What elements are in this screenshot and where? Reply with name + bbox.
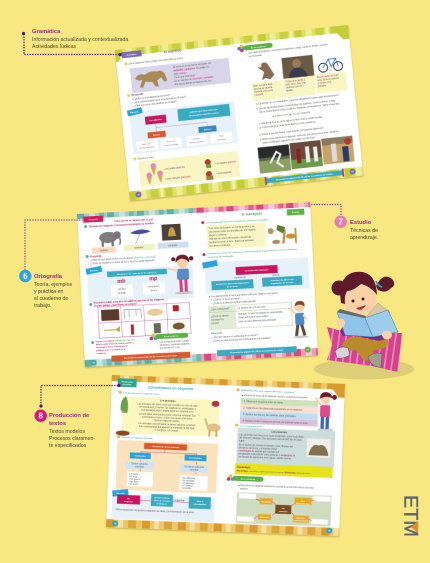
heading: El adjetivo: El adjetivo [163, 48, 182, 54]
sweater [340, 323, 390, 341]
illustration: girl pointing [167, 254, 195, 295]
pill: En tu cuaderno: En tu cuaderno [251, 45, 266, 49]
label: Ortografía: el cuaderno de [34, 296, 68, 302]
panel: Aprendo esquema: ideas y [196, 501, 204, 503]
page number 55: 55 [328, 531, 331, 533]
text cards: Es pequeña, de color [317, 74, 339, 79]
panel: classification chart: vertebral [190, 469, 199, 472]
panel: Aprendo m antes de b y p: Escribimos "m" antes de la "b" y de la "p". [117, 271, 158, 276]
panel: La técnica del subrayado [202, 255, 310, 294]
left page content: Lee el siguiente texto. Luego, [160, 340, 190, 344]
right page content: Lee atentamente el texto y subraya las palabras subrayadas. [206, 218, 270, 224]
text cards: y ruedas muy [318, 81, 332, 85]
right page content: ■ Reproduce el siguiente esquema y completa con la información del texto [238, 484, 315, 490]
right page content: • ¿Por qué usamos el subrayado en un texto? [211, 334, 258, 339]
panel: monkey text: Por eso lo llaman el travieso del zoo. [175, 79, 213, 86]
panel: La técnica del subrayado: consiste en [234, 276, 247, 280]
panel: scheme: cavernas [279, 510, 288, 513]
panel: classification chart: • las aves [129, 481, 139, 484]
option stripes: 3. Escribe los títulos y las palabras clave principales. [243, 413, 297, 418]
panel: Los animales: el cangrejo y el caracol. [155, 429, 179, 433]
right page content: ■ Lee atentamente el texto que debes subrayar. Fíjate en las partes. [209, 292, 278, 298]
option stripes [240, 398, 318, 427]
text cards: azul, tiene un asiento [317, 77, 340, 82]
pill: En tu cuaderno [227, 474, 264, 482]
left page content: ¿Cómo se escribe la m antes de la b y la p? en estas palabras? [91, 259, 156, 265]
table: Usar un color diferente para destacar. [238, 319, 277, 324]
panel: classification chart: No tienen columna [185, 465, 204, 469]
picture: umbrella [130, 229, 151, 244]
right page content: ■ Lee las siguientes frases y relaciónalas los adjetivos. Vuelve a leerlo. Luego [257, 99, 336, 111]
left page content: ¿Antes de qué letras va la m en la palabra sombrilla y campana? [90, 256, 157, 262]
label: Gramática: Información actualizada y contextualizada [32, 37, 128, 43]
head [332, 272, 394, 315]
spread: Producción de textos pages [106, 375, 345, 536]
picture: llama [204, 418, 221, 437]
panel: classification chart: Vertebrados [134, 454, 147, 458]
right page content: Lee el siguiente texto. [240, 424, 263, 428]
panel: Aprendo concept map: Plural [219, 134, 224, 138]
panel: scheme: Animales [296, 516, 306, 520]
panel: classification chart: • el caracol [181, 484, 193, 488]
panel: Aprendo m antes de b y p [85, 261, 194, 303]
right page content: cuatro cualidades (adjetivos) de cuáles son las fotos. [262, 136, 316, 145]
shadow [314, 358, 414, 380]
left page content: palabras con m y repasa en tu [96, 348, 127, 352]
panel: Aprendo esquema: subordinadas [193, 503, 207, 506]
label: Producción de textos: te especificados [49, 443, 87, 449]
right page content [237, 34, 355, 175]
label: Producción de textos: 8 [38, 412, 43, 421]
photo: cave [306, 438, 331, 458]
page number 53: 53 [307, 349, 310, 352]
panel: ice cream activity: • un helado gracioso [164, 166, 186, 171]
pill: En tu cuaderno: En tu cuaderno [164, 335, 179, 338]
right page content: la técnica del subrayado. [208, 255, 234, 259]
page number 53 [305, 346, 311, 353]
panel: Las cavernas: del Silencio y Bosque. Son los pasos más de 240 km de largo, [239, 437, 303, 442]
label: Gramática: Actividades lúdicas [32, 44, 77, 50]
pill: En tu cuaderno [149, 332, 188, 340]
panel: scheme: características [296, 502, 311, 506]
photo: volleyball [321, 136, 355, 165]
page number 50 [135, 191, 142, 198]
panel: Vocabulario: Murciélago: mamífero volador que vive en cuevas. Estalactita: forma de agua. [237, 469, 311, 475]
right page content: Reflexiona. ¿Por qué usamos diferentes esquemas? [241, 389, 296, 394]
panel: monkey text [130, 58, 231, 93]
panel: Aprendo concept map: El mono travieso [190, 140, 204, 145]
panel: Aprendo esquema: Utilizo esquemas me ayuda a organizar las ideas y la información de un texto. [116, 508, 195, 514]
option stripes: 4. Revisa si todo el esquema permite comprender mejor el texto. [243, 419, 309, 425]
panel: classification chart: vertebral [135, 465, 144, 469]
panel: Las cavernas: Las cavernas son huecos en rocas profundas, como la de Belén [239, 434, 305, 439]
text cards: y grande. [254, 93, 264, 97]
panel: Aprendo esquema: esquema [124, 501, 134, 503]
right page content: ■ el perro alegre ■ unos niños ágiles ■ unos cuadernos [260, 120, 317, 129]
panel: classification chart: • los peces [129, 479, 141, 481]
panel: Aprendo concept map: Los monos [217, 139, 226, 142]
right page content [225, 388, 338, 534]
label: Producción de textos: Textos modelos [49, 429, 85, 435]
pill: En tu cuaderno [243, 43, 273, 51]
panel: Las cavernas: tiempo le da forma, y el monitor llama [239, 447, 278, 451]
panel: monkey text: El mono es el rey de los animales. Es [173, 62, 212, 69]
label: Estudio: Técnicas de [350, 228, 378, 234]
text cards: cariñoso con mi [286, 85, 303, 90]
section tag: Estudio [286, 208, 305, 216]
panel: monkey text: Tiene una cola larga. [174, 74, 196, 79]
panel: Los animales: Los animales vertebrados tienen columna vertebral. Son [139, 412, 197, 418]
text cards: grandes. [318, 84, 327, 88]
picture: animals [267, 224, 297, 245]
text cards: Tiene la cola corta [254, 89, 274, 94]
bottom bar [217, 346, 297, 356]
spread: Ortografía and Estudio pages [77, 202, 318, 367]
panel: Aprendo concept map: palabras que dicen cómo son [190, 108, 218, 114]
left page content: identifica y copia las palabras [160, 343, 190, 347]
left page content: • ¿Qué características tiene el personaje en el texto? [132, 96, 187, 105]
panel: Aprendo m antes de b y p: mb [117, 279, 126, 285]
panel: Los animales: Los animales invertebrados no tienen columna vertebral. [138, 422, 196, 427]
left page content: Observo y creo [138, 156, 154, 161]
panel: Aprendo m antes de b y p: ombligo [118, 293, 127, 295]
word labels: campana [168, 245, 178, 247]
panel: classification chart: • la hormiga [182, 479, 195, 483]
right page content: ■ Conversa con un compañero: ¿qué has descubierto sobre estas descripciones? [256, 94, 340, 106]
left page content: descarga la tarea. Selecciona las [96, 345, 129, 349]
panel: Aprendo m antes de b y p: tiempo [150, 289, 158, 292]
panel: Aprendo concept map: las personas, animales y cosas [189, 111, 220, 118]
panel: Aprendo esquema [111, 488, 215, 522]
bottom bar: Desarrolla las páginas 85 y 86 de tu cuaderno de trabajo. [124, 354, 178, 360]
panel: text about animals: Además de mono del corazón, donde hay [209, 236, 252, 241]
heading: Uso de la m: Uso de la m antes de b y p [114, 217, 153, 223]
panel: Aprendo esquema: en bloques [157, 503, 168, 506]
panel: text about animals: alegre y contenta. [209, 233, 227, 237]
label: Producción de textos: Producción de [49, 413, 90, 419]
left page content: Observa las imágenes y pronuncia lentamente su nombre. [89, 222, 155, 228]
picture: eagle [257, 62, 275, 81]
panel: Los animales: También algunos reptiles. [154, 419, 180, 423]
page number 52 [91, 359, 97, 366]
picture: parrot [212, 401, 220, 407]
panel: text about animals: Si el mono de bosque, es rey de la selva y se [209, 225, 255, 230]
section tag: Gramática [121, 50, 142, 58]
label: Producción de textos: textos [49, 421, 66, 427]
left page content: Lee el siguiente texto y fíjate cómo describen al mono. [128, 57, 184, 66]
panel: Aprendo esquema: ideas de un texto [154, 499, 171, 503]
left page content: Observa el esquema del texto. [121, 436, 153, 440]
panel: Las cavernas: lugar. [239, 440, 245, 443]
bottom bar [265, 169, 344, 185]
legs [342, 337, 388, 361]
panel: Aprendo esquema: Aprendo [116, 492, 125, 495]
panel: classification chart: • el perro [129, 473, 139, 476]
illustration: girl [314, 392, 337, 432]
panel: classification chart: • el cangrejo [182, 482, 195, 485]
photo: football [258, 144, 291, 173]
panel: Los animales: invertebrados según tengan columna vertebral o no. [141, 408, 194, 413]
panel: Los animales [122, 396, 220, 437]
panel: Aprendo concept map: Número [204, 128, 212, 132]
left page content: cuaderno. [96, 352, 107, 355]
table: ¿Qué subrayaste? [211, 307, 230, 311]
bottom bar: Desarrolla las páginas 82, 83 y 84 de tu cuaderno de trabajo. [276, 173, 333, 182]
panel: Aprendo concept map: La mona divertida [163, 143, 179, 147]
picture: bell [161, 224, 181, 241]
panel: classification chart: • el reptil [129, 483, 138, 486]
label: Estudio [310, 204, 378, 241]
text cards: pico en su cabeza. [254, 87, 273, 91]
book [337, 309, 398, 337]
panel: Aprendo m antes de b y p: Aprendo [90, 269, 99, 272]
page number 50: 50 [137, 194, 141, 197]
right page content: ■ Observa las siguientes imágenes. Indica de qué deportes se trata. Identifica [260, 130, 339, 141]
panel: Los animales: Son invertebrados por ejemplo la mariposa, la hormiga, [139, 425, 195, 430]
panel: La técnica del subrayado: reconocer las ideas más [271, 278, 295, 282]
right page content: su respuesta. [248, 54, 263, 58]
panel: ice cream activity: • unos helados graciosos [165, 175, 192, 181]
panel: ice cream activity: • un payaso gracioso [215, 160, 237, 165]
panel: monkey text: Es un animal muy divertido y amigable. [174, 75, 215, 83]
label: Ortografía [19, 220, 83, 309]
hands [337, 318, 345, 328]
panel: Aprendo esquema: Un [127, 498, 131, 500]
picture: bicycle [318, 58, 343, 73]
panel: scheme: Las [282, 508, 286, 510]
label: Producción de textos [34, 384, 121, 449]
left page content: Escribe debajo. ¿Qué tienen en común? [94, 303, 138, 308]
panel: La técnica del subrayado: permite [272, 274, 281, 277]
left page content: • ¿Para qué sirven las palabras en rosado? [133, 100, 177, 108]
panel: Aprendo concept map [127, 97, 238, 154]
panel: Los animales: vertebrados el perro, el león, los peces y las aves. [142, 415, 193, 420]
shoes [335, 347, 350, 358]
panel: classification chart: • el león [129, 476, 138, 479]
panel: classification chart: • la mariposa [182, 477, 196, 480]
panel: text about animals: también al tucán el león. Todos los animales [209, 239, 255, 244]
panel: classification chart: Clasificación de los animales [152, 446, 180, 449]
panel: Aprendo m antes de b y p: campesino [148, 286, 160, 289]
panel: Aprendo concept map: Género [153, 133, 161, 137]
right page content: haz la concordancia entre el adjetivo resaltado correctamente. Sigue el ejemplo. [259, 102, 341, 114]
cushion [327, 327, 402, 372]
right page content: Responde. [211, 333, 223, 335]
table: subrayar los [211, 318, 225, 322]
label: Estudio: aprendizaje. [350, 235, 378, 241]
page number 55 [326, 528, 332, 534]
right page content: ■ Escucha lo mejor de la siguiente forma y completa el esquema. [242, 394, 308, 399]
section tag: Producción de textos [118, 378, 137, 387]
page number 52: 52 [93, 362, 96, 365]
panel: text about animals: encuentran todos los animales de una manera [209, 228, 256, 234]
icon: flower [237, 44, 246, 53]
right page content: ■ Vuelve a leer las frases: ¿qué sucede con algunos adjetivos? [259, 127, 324, 137]
text cards: familia. [286, 90, 294, 93]
spread: Gramática pages [115, 25, 363, 200]
left page content: • ¿Quién es el protagonista del texto? [132, 94, 171, 101]
label: Ortografía: trabajo. [34, 303, 51, 309]
panel: La técnica del subrayado: La técnica del subrayado [245, 268, 269, 273]
left page content [83, 220, 199, 366]
word labels: elefante [100, 249, 109, 252]
section tag: Estudio: Estudio [292, 211, 300, 214]
panel: classification chart: Invertebrados [189, 457, 203, 460]
left page content: que llevan mb y mp. [160, 347, 181, 350]
table: La técnica de un buen texto. [238, 306, 267, 310]
panel: Aprendo concept map: Masculino [142, 143, 152, 146]
option stripes: 1. Observa el esquema antes de leerlo. [244, 400, 284, 404]
left page content: Encuentra cuáles usan la m en palabras que van en las imágenes. [94, 298, 165, 305]
table: ¿Cómo se deben [211, 315, 229, 318]
section tag: Ortografía: Ortografía [88, 218, 99, 221]
panel: scheme: representativos [293, 519, 309, 523]
right page content [200, 216, 313, 358]
page number 51: 51 [352, 171, 355, 174]
panel: scheme: Están en [260, 516, 270, 519]
table: Subrayar lo más importante de cada párrafo. [238, 311, 284, 316]
panel: Aprendo m antes de b y p: sombra [118, 288, 126, 291]
illustration: girl reading on cushion [314, 272, 414, 380]
label: Ortografía: Ortografía [34, 274, 63, 280]
section tag: Gramática: Gramática [127, 53, 137, 57]
left page content: Lee atentamente el siguiente texto. [123, 391, 160, 396]
book pages [365, 303, 390, 318]
right page content: anterior. [240, 487, 249, 491]
panel: Las cavernas: Las cavernas [271, 431, 288, 434]
photo: football team [289, 140, 323, 169]
picture: crab [116, 430, 130, 436]
panel: Aprendo esquema: y organizar [173, 499, 185, 502]
panel: text about animals [206, 222, 266, 249]
panel: Las cavernas [236, 428, 335, 467]
panel: Vocabulario: Vocabulario [237, 466, 251, 469]
panel: Aprendo concept map: Aprendo [130, 110, 139, 114]
picture: elephant [99, 231, 121, 247]
panel: scheme: Se ubican [261, 501, 272, 504]
option stripes: 2. Organiza en dos ideas más importantes en el esquema. [243, 406, 303, 412]
picture grid [98, 302, 191, 338]
panel: Vocabulario [235, 463, 333, 478]
panel: scheme [236, 492, 332, 527]
panel: ice cream activity [138, 151, 240, 187]
text cards: pelo corto. Soy muy [285, 81, 307, 87]
section tag: Producción de textos: Producción [122, 380, 133, 384]
pill: En tu cuaderno: En tu cuaderno [241, 477, 256, 481]
right page content: • ¿Cómo te sirve la técnica del subrayado en tus estudios? [211, 337, 271, 343]
heading: Completamos un esquema: Completamos un esquema [147, 385, 194, 391]
right page content: ■ el disco nuevo ■ rojo gato pequeño [273, 111, 311, 118]
panel: Las cavernas: las grandes impresiones como pinturas y estalactitas de [239, 452, 296, 458]
label: Gramática: Gramática [32, 29, 61, 35]
section tag: Ortografía [83, 216, 103, 223]
word labels [92, 241, 189, 254]
left page content: Responde. [90, 256, 102, 258]
panel: Aprendo m antes de b y p: mp [149, 276, 158, 282]
panel: Las cavernas: murciélagos de piedras que cuelgan por [239, 450, 280, 454]
panel: text about animals: se sienten contentos. [209, 244, 231, 248]
panel: Las cavernas: las formas de agua para tener agua y varias cuevas. [238, 455, 292, 461]
label: Gramática [22, 29, 128, 56]
label: Estudio: Estudio [350, 220, 372, 226]
word labels: sombrilla [134, 246, 144, 250]
left page content: Ingresa a la página www.grupo-elm.com. [96, 338, 136, 343]
panel: Aprendo concept map: Femenino [166, 141, 176, 144]
panel: Los animales: se reproducen y mueren. Se clasifican en vertebrados e [139, 405, 197, 411]
panel: Aprendo esquema: permite ordenar [154, 496, 170, 500]
picture: man [281, 55, 314, 79]
panel: classification chart [115, 440, 218, 493]
right page content: Después presentan en subrayar la información más importante de un texto, utilizamos [208, 248, 298, 255]
panel: Los animales: Los animales son seres vivos que cumplen un ciclo de vida: [137, 402, 198, 408]
illustration: boy [288, 300, 309, 339]
panel: Aprendo concept map: El mono divertido [140, 145, 154, 150]
logo: ETM: ETM [400, 495, 420, 537]
panel: monkey text: pequeño y gracioso. Su pelaje es [173, 65, 210, 72]
panel: scheme: Sus [301, 501, 306, 503]
panel: Los animales: Los animales [160, 399, 176, 403]
left page content [111, 391, 222, 530]
label: Producción de textos: Procesos claramen- [49, 436, 95, 442]
left page content [122, 51, 242, 198]
panel: ice cream activity: • unos payasos [216, 171, 232, 175]
heading: El subrayado: El subrayado [241, 212, 262, 217]
panel: monkey text: color marrón. [174, 71, 188, 76]
picture: frog [120, 396, 128, 413]
right page content: • ¿Cuál es la idea principal en cada párrafo? [211, 300, 257, 305]
right page content: ■ árboles altos ■ un perro ágil ■ un libro chico ■ casas bonitas [259, 116, 323, 126]
panel: La técnica del subrayado: destacar las ideas más importantes [216, 281, 250, 286]
panel: classification chart: Tienen columna [131, 463, 148, 466]
panel: Aprendo concept map: Los adjetivos [149, 118, 163, 122]
text cards: Este ser tiene bajo [253, 83, 273, 88]
section tag: Producción de textos: de textos [123, 383, 132, 387]
label: Ortografía: 6 [23, 272, 28, 281]
page number 54: 54 [114, 522, 117, 526]
right page content: • ¿Cuál es el tema del texto? [211, 297, 241, 302]
label: Estudio: 7 [338, 218, 343, 227]
panel: classification chart: • la araña [181, 487, 192, 490]
right page content: Lee cada descripción y completa la siguiente. Luego, copia las fichas y escribe [248, 43, 329, 55]
panel: La técnica del subrayado: importantes de un texto. [271, 281, 294, 285]
label: Ortografía: y práctica en [34, 289, 64, 295]
logo accent [411, 521, 418, 533]
left page content: Respondo [132, 93, 144, 97]
left page content: Abre el aula virtual de Comunicación y [96, 341, 135, 346]
table: textos? [211, 322, 220, 325]
panel: Las cavernas: En el interior de cuevas se pueden y ríos. El paso del [239, 444, 293, 449]
bottom bar: Desarrolla las páginas 87 y 88 de tu cuaderno de trabajo. [230, 349, 284, 355]
text cards [251, 71, 348, 101]
page number 51 [349, 168, 356, 175]
table [209, 302, 293, 330]
panel: La técnica del subrayado: de un texto. [227, 285, 239, 289]
label: Ortografía: Teoría, ejemplos [34, 282, 72, 288]
text cards: Tengo una mejilla y [285, 80, 306, 84]
bottom bar [111, 352, 190, 362]
table: Evitar subrayar el texto entero. [238, 315, 270, 320]
panel: Aprendo concept map: Singular [193, 137, 200, 141]
